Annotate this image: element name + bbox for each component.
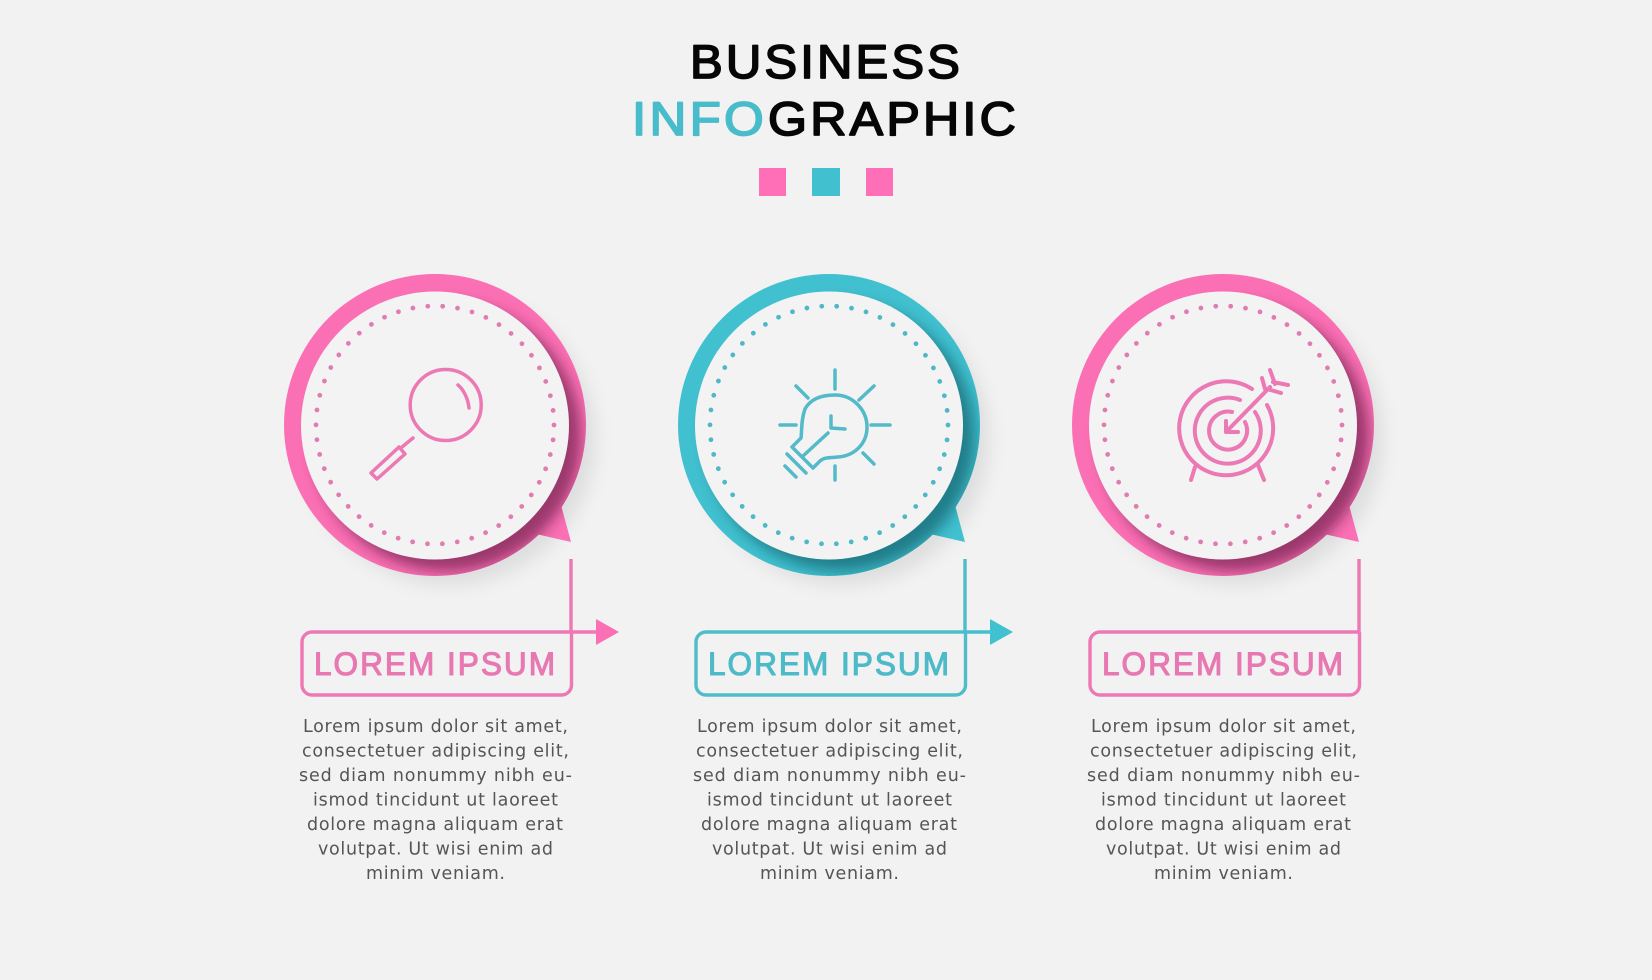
- body text: dolore magna aliquam erat: [1095, 815, 1351, 835]
- body text: consectetuer adipiscing elit,: [302, 742, 569, 762]
- body text: [299, 717, 572, 884]
- body text: dolore magna aliquam erat: [701, 815, 957, 835]
- panel: step 1: [284, 274, 619, 884]
- body text: consectetuer adipiscing elit,: [1090, 742, 1357, 762]
- body text: minim veniam.: [760, 864, 899, 884]
- title decoration squares: [759, 168, 893, 196]
- label box: [1090, 632, 1360, 695]
- icon: target with arrow: [1179, 370, 1288, 480]
- body text: Lorem ipsum dolor sit amet,: [697, 717, 962, 737]
- connector: [1357, 559, 1361, 633]
- speech-bubble circle: pink: [1072, 274, 1383, 585]
- icon: magnifying glass: [371, 370, 481, 479]
- label box: [696, 632, 966, 695]
- title: [632, 35, 1019, 145]
- label box: LOREM IPSUM: [1102, 646, 1345, 682]
- body text: Lorem ipsum dolor sit amet,: [1091, 717, 1356, 737]
- body text: sed diam nonummy nibh eu-: [299, 766, 572, 786]
- body text: volutpat. Ut wisi enim ad: [318, 840, 553, 860]
- body text: Lorem ipsum dolor sit amet,: [303, 717, 568, 737]
- body text: minim veniam.: [1154, 864, 1293, 884]
- body text: volutpat. Ut wisi enim ad: [1106, 840, 1341, 860]
- title: GRAPHIC: [768, 92, 1019, 145]
- label box: LOREM IPSUM: [314, 646, 557, 682]
- speech-bubble circle: teal: [678, 274, 989, 585]
- panel: step 2: [678, 274, 1013, 884]
- body text: sed diam nonummy nibh eu-: [1087, 766, 1360, 786]
- body text: [693, 717, 966, 884]
- connector and arrow: [571, 559, 619, 645]
- title: INFO: [632, 92, 767, 145]
- title: BUSINESS: [690, 35, 963, 88]
- body text: [1087, 717, 1360, 884]
- label box: [302, 632, 572, 695]
- body text: ismod tincidunt ut laoreet: [707, 790, 952, 810]
- connector and arrow: [965, 559, 1013, 645]
- body text: sed diam nonummy nibh eu-: [693, 766, 966, 786]
- body text: ismod tincidunt ut laoreet: [1101, 790, 1346, 810]
- panel: step 3: [1072, 274, 1383, 884]
- icon: light bulb: [780, 370, 890, 480]
- label box: LOREM IPSUM: [708, 646, 951, 682]
- body text: consectetuer adipiscing elit,: [696, 742, 963, 762]
- body text: dolore magna aliquam erat: [307, 815, 563, 835]
- body text: minim veniam.: [366, 864, 505, 884]
- speech-bubble circle: pink: [284, 274, 595, 585]
- body text: volutpat. Ut wisi enim ad: [712, 840, 947, 860]
- body text: ismod tincidunt ut laoreet: [313, 790, 558, 810]
